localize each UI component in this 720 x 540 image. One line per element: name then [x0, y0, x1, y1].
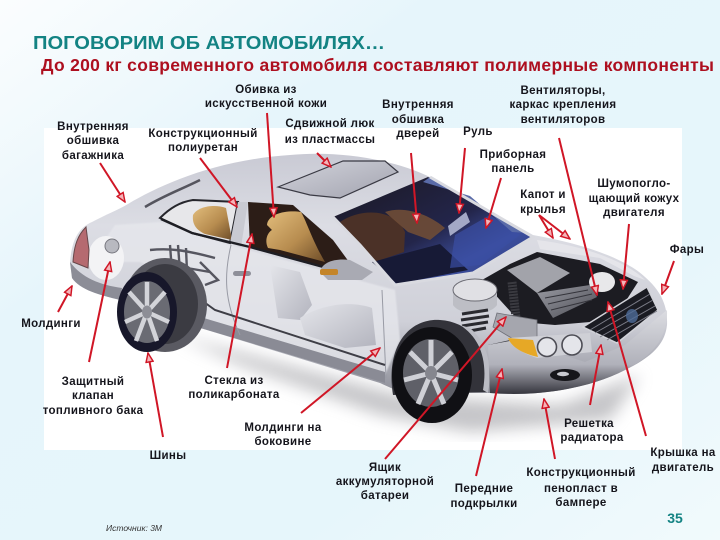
- label: fans: каркас крепления: [510, 99, 616, 111]
- label: trunk lining: обшивка: [67, 135, 119, 147]
- rear suspension: [150, 245, 218, 285]
- fog lamp: [550, 369, 580, 381]
- light body side panel: [90, 222, 400, 375]
- label: structural polyurethane: Конструкционный: [148, 128, 258, 140]
- label: polycarbonate glass: Стекла из: [204, 375, 264, 387]
- arrow: fans: [559, 138, 597, 295]
- label: wheel liners: подкрылки: [450, 498, 518, 510]
- taillight: [73, 227, 89, 268]
- front wheel arch: [391, 320, 488, 395]
- fuel tank and filler: [88, 236, 124, 280]
- arrow: steering wheel: [459, 148, 465, 213]
- label: side mouldings: боковине: [254, 436, 312, 448]
- battery box: [493, 313, 537, 343]
- arrow: engine cover acoustic: [623, 224, 629, 289]
- hub: [142, 306, 152, 318]
- label: fuel valve: Защитный: [62, 376, 124, 388]
- hub: [425, 366, 437, 380]
- hood edge: [537, 240, 645, 280]
- label: artificial leather: Обивка из: [235, 84, 297, 96]
- label: door lining: Внутренняя: [382, 99, 454, 111]
- strut tower: [453, 279, 497, 332]
- arrow: fenders: [539, 215, 570, 239]
- engine top: [507, 257, 570, 293]
- arrow: wheel liners: [476, 369, 502, 476]
- intake hose: [512, 282, 516, 318]
- front brake and radiator detail: [488, 340, 515, 375]
- fog lamp glint: [557, 372, 569, 376]
- car cutaway illustration: [70, 154, 667, 432]
- arrow: door lining: [411, 153, 417, 223]
- label: fuel valve: топливного бака: [43, 405, 144, 417]
- label: mouldings: Молдинги: [21, 318, 81, 330]
- label: battery box: Ящик: [369, 462, 401, 474]
- rear wheel: [117, 258, 207, 352]
- mirror: [320, 260, 373, 280]
- rear roof groove: [145, 180, 200, 207]
- engine: [507, 257, 615, 318]
- label: engine acoustic cover: двигателя: [603, 207, 665, 219]
- front bumper: [488, 310, 667, 394]
- arrow: bumper foam: [544, 399, 555, 459]
- label: bumper foam: пенопласт в: [544, 483, 618, 495]
- grille badge: [626, 309, 638, 323]
- page number: 35: [667, 510, 683, 526]
- rim: [124, 281, 170, 343]
- label: hood and fenders: Капот и: [520, 189, 566, 201]
- centre pillar: [230, 202, 248, 247]
- label: tyres: Шины: [150, 450, 186, 462]
- arrow: mouldings: [58, 286, 72, 312]
- label: battery box: аккумуляторной: [336, 476, 434, 488]
- label: bumper foam: Конструкционный: [526, 467, 636, 479]
- arrow: battery box: [385, 317, 506, 459]
- grille: [583, 287, 658, 343]
- label: bumper foam: бампере: [555, 497, 607, 509]
- sill strips: [197, 297, 385, 365]
- title: ПОГОВОРИМ ОБ АВТОМОБИЛЯХ…: [33, 33, 385, 53]
- label: fans: Вентиляторы,: [520, 85, 606, 97]
- label: trunk lining: багажника: [62, 150, 124, 162]
- engine bay: [482, 252, 638, 325]
- label: side mouldings: Молдинги на: [244, 422, 322, 434]
- car body: [70, 154, 667, 394]
- arrow: trunk lining: [100, 163, 125, 202]
- label: engine cover: Крышка на: [650, 447, 716, 459]
- rear side window: [160, 200, 238, 243]
- tread: [132, 264, 198, 344]
- arrow: dashboard: [486, 178, 501, 228]
- arrow: sunroof: [317, 153, 331, 167]
- arrows: [58, 113, 674, 476]
- rim: [403, 339, 459, 407]
- reservoirs: [589, 272, 615, 292]
- rear seat: [193, 206, 232, 240]
- arrow: hood: [539, 215, 553, 238]
- label: trunk lining: Внутренняя: [57, 121, 129, 133]
- rear bumper shading: [70, 262, 122, 300]
- door seam: [227, 245, 386, 378]
- arrow: side mouldings: [301, 348, 380, 413]
- label: headlights: Фары: [670, 244, 704, 256]
- tyre: [392, 327, 472, 423]
- front seat: [266, 211, 325, 262]
- engine cover: [537, 285, 597, 318]
- window lower trim: [161, 219, 360, 277]
- label: structural polyurethane: полиуретан: [168, 142, 238, 154]
- arrow: tyres: [148, 353, 163, 437]
- label: sunroof: из пластмассы: [285, 134, 375, 146]
- subtitle: До 200 кг современного автомобиля составляют полимерные компоненты: [41, 55, 714, 75]
- label: radiator grille: радиатора: [560, 432, 624, 444]
- label: engine acoustic cover: щающий кожух: [589, 193, 680, 205]
- door handle: [233, 271, 251, 276]
- arrow: structural polyurethane: [200, 158, 237, 207]
- label: hood and fenders: крылья: [520, 204, 566, 216]
- label: steering wheel: Руль: [463, 126, 493, 138]
- label: engine cover: двигатель: [652, 462, 714, 474]
- label: door lining: обшивка: [392, 114, 444, 126]
- arrow: fuel valve: [89, 262, 110, 362]
- windshield and far interior: [333, 177, 533, 285]
- label: engine acoustic cover: Шумопогло-: [597, 178, 671, 190]
- roof glass highlight: [423, 177, 528, 233]
- tyre: [117, 272, 177, 352]
- label: polycarbonate glass: поликарбоната: [188, 389, 280, 401]
- far seats seen through glass: [340, 213, 405, 262]
- label: fans: вентиляторов: [521, 114, 605, 126]
- label: dashboard: панель: [491, 163, 535, 175]
- sill band: [197, 316, 385, 383]
- ground shadow: [175, 335, 640, 432]
- steering wheel: [448, 212, 470, 236]
- label: artificial leather: искусственной кожи: [205, 98, 327, 110]
- front wheel: [392, 327, 472, 423]
- front side window interior: [161, 202, 360, 277]
- ghost seat cushion: [300, 304, 376, 348]
- windshield frame: [333, 177, 533, 285]
- lower dark footwell: [372, 244, 468, 284]
- arrow: radiator grille: [590, 345, 601, 405]
- arrow: engine cover: [608, 302, 646, 436]
- arrow: artificial leather: [267, 113, 274, 217]
- label: dashboard: Приборная: [480, 149, 546, 161]
- label: sunroof: Сдвижной люк: [285, 118, 375, 130]
- wheel arch: [123, 258, 207, 352]
- headlight: [508, 333, 592, 358]
- label: wheel liners: Передние: [455, 483, 513, 495]
- label: door lining: дверей: [396, 128, 440, 140]
- arrow: headlights: [662, 261, 674, 294]
- arrow: polycarbonate glass: [227, 234, 252, 368]
- label: radiator grille: Решетка: [564, 418, 614, 430]
- source note: Источник: 3М: [106, 523, 163, 533]
- label: fuel valve: клапан: [72, 390, 114, 402]
- sunroof: [278, 161, 398, 198]
- white photo panel: [44, 128, 682, 450]
- ghost rear seat back: [270, 265, 312, 320]
- dashboard glare: [450, 215, 520, 268]
- label: battery box: батареи: [361, 490, 409, 502]
